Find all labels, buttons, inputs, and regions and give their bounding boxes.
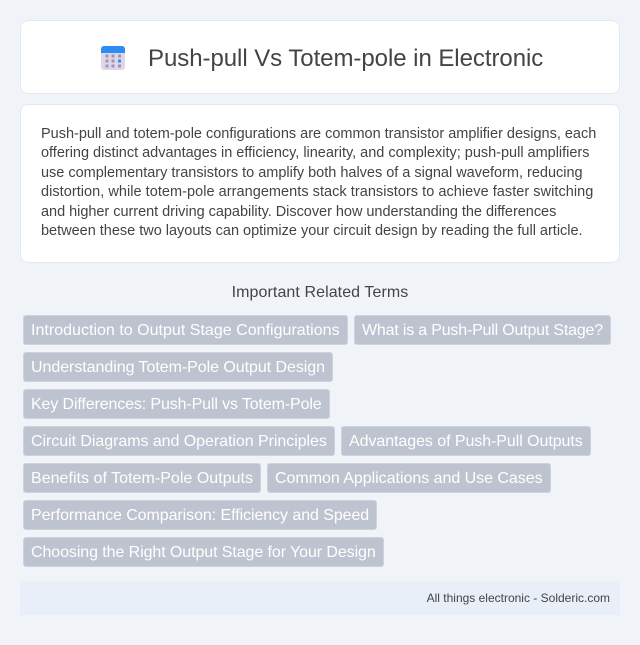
footer text: All things electronic - Solderic.com	[427, 591, 610, 605]
tag	[23, 315, 348, 345]
tag: Introduction to Output Stage Configurations	[31, 322, 340, 339]
intro paragraph	[41, 126, 596, 239]
footer bar	[20, 581, 620, 615]
tag	[23, 352, 333, 382]
title: Push-pull Vs Totem-pole in Electronic	[148, 45, 543, 72]
related terms heading: Important Related Terms	[232, 284, 408, 301]
intro paragraph: distortion, while totem-pole arrangements stack transistors to achieve faster switching	[41, 184, 593, 200]
tag	[23, 463, 261, 493]
header card	[20, 20, 620, 94]
tag: Common Applications and Use Cases	[275, 470, 543, 487]
intro paragraph: and higher current driving capability. Discover how understanding the differences	[41, 204, 556, 220]
intro paragraph: use complementary transistors to amplify both halves of a signal waveform, reducing	[41, 165, 583, 181]
tag: Performance Comparison: Efficiency and Speed	[31, 507, 369, 524]
tag: Choosing the Right Output Stage for Your Design	[31, 544, 376, 561]
intro paragraph: between these two layouts can optimize your circuit design by reading the full article.	[41, 223, 583, 239]
tag	[23, 500, 377, 530]
intro paragraph: offering distinct advantages in efficiency, linearity, and complexity; push-pull amplifiers	[41, 145, 590, 161]
tag list	[23, 315, 611, 567]
intro paragraph: Push-pull and totem-pole configurations are common transistor amplifier designs, each	[41, 126, 596, 142]
tag	[341, 426, 591, 456]
tag: Circuit Diagrams and Operation Principles	[31, 433, 327, 450]
tag	[23, 389, 330, 419]
icon: calendar	[101, 46, 125, 70]
tag	[23, 426, 335, 456]
tag: What is a Push-Pull Output Stage?	[362, 322, 603, 339]
tag: Key Differences: Push-Pull vs Totem-Pole	[31, 396, 322, 413]
tag: Advantages of Push-Pull Outputs	[349, 433, 583, 450]
tag	[23, 537, 384, 567]
intro text panel	[20, 104, 620, 263]
tag	[354, 315, 611, 345]
tag: Benefits of Totem-Pole Outputs	[31, 470, 253, 487]
tag: Understanding Totem-Pole Output Design	[31, 359, 325, 376]
tag	[267, 463, 551, 493]
